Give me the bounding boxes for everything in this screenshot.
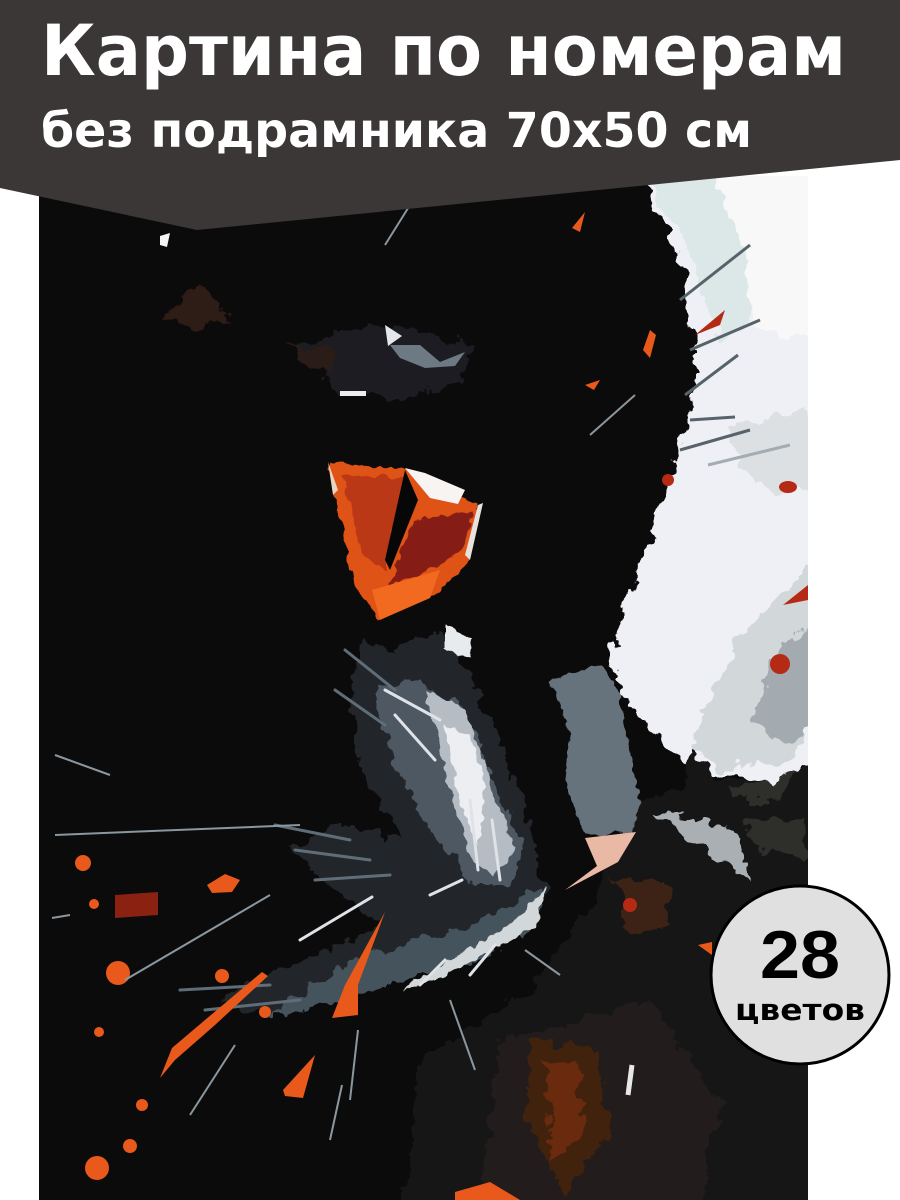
painting: black cat portrait <box>39 170 820 1200</box>
subtitle: без подрамника 70х50 см <box>41 103 752 159</box>
badge caption: цветов <box>735 993 865 1027</box>
cheek fur <box>180 625 548 1015</box>
white fur on the muzzle <box>612 170 820 820</box>
cat nose <box>550 665 640 890</box>
orange and red paint splashes <box>75 212 712 1200</box>
header banner <box>0 0 900 230</box>
lower right dark fur <box>400 760 820 1200</box>
fine whiskers on the left <box>52 205 635 1140</box>
orange cat eye <box>328 462 483 620</box>
badge: 28 colours <box>711 886 889 1064</box>
badge number: 28 <box>760 917 840 993</box>
red accents on white fur <box>115 310 808 918</box>
cheek fur strokes <box>300 690 500 985</box>
whiskers over the white fur <box>680 245 790 465</box>
title: Картина по номерам <box>41 10 846 92</box>
brow fur and closed eye highlights <box>160 233 470 400</box>
